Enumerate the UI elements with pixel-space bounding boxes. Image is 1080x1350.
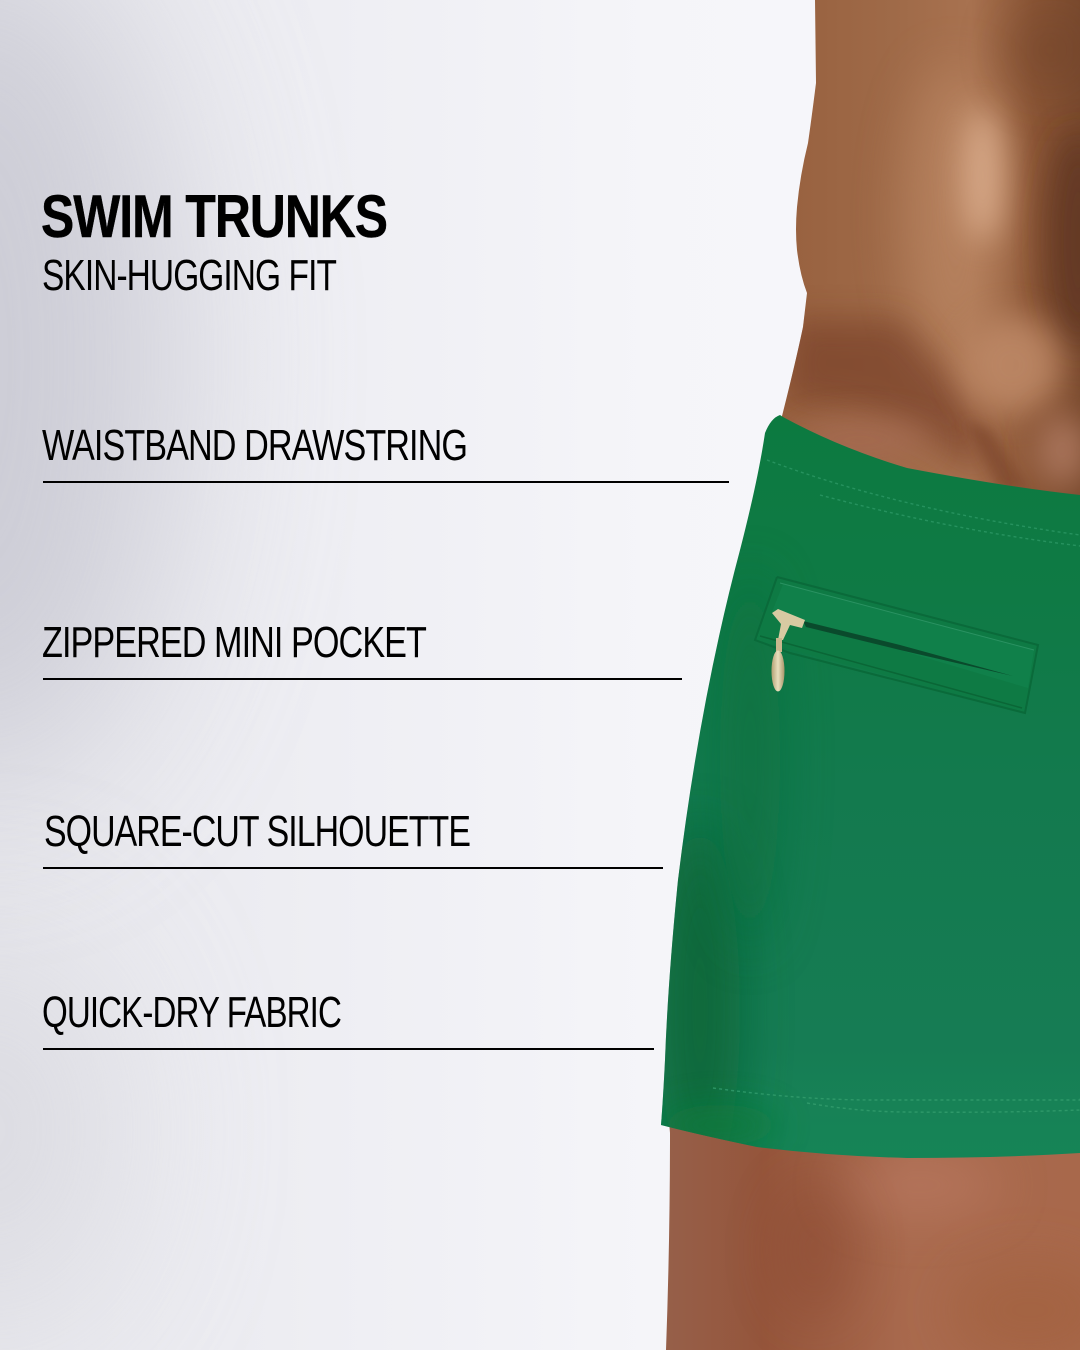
zipper pocket — [755, 577, 1038, 713]
zipper opening — [803, 621, 1013, 676]
feature: square-cut silhouette: SQUARE-CUT SILHOUETTE — [44, 807, 470, 856]
feature: zippered mini pocket: ZIPPERED MINI POCKET — [42, 618, 426, 667]
photo: torso skin — [782, 0, 1080, 495]
waistband stitching — [767, 460, 1080, 546]
subtitle: SKIN-HUGGING FIT — [42, 251, 336, 300]
photo: thigh skin — [666, 1127, 1080, 1350]
feature: quick-dry fabric: QUICK-DRY FABRIC — [42, 988, 341, 1037]
photo: green swim trunks — [650, 410, 1080, 1200]
title: SWIM TRUNKS — [41, 183, 387, 250]
feature: waistband drawstring: WAISTBAND DRAWSTRING — [42, 421, 467, 470]
zipper pull — [772, 609, 805, 692]
hem stitching — [713, 1088, 1080, 1112]
